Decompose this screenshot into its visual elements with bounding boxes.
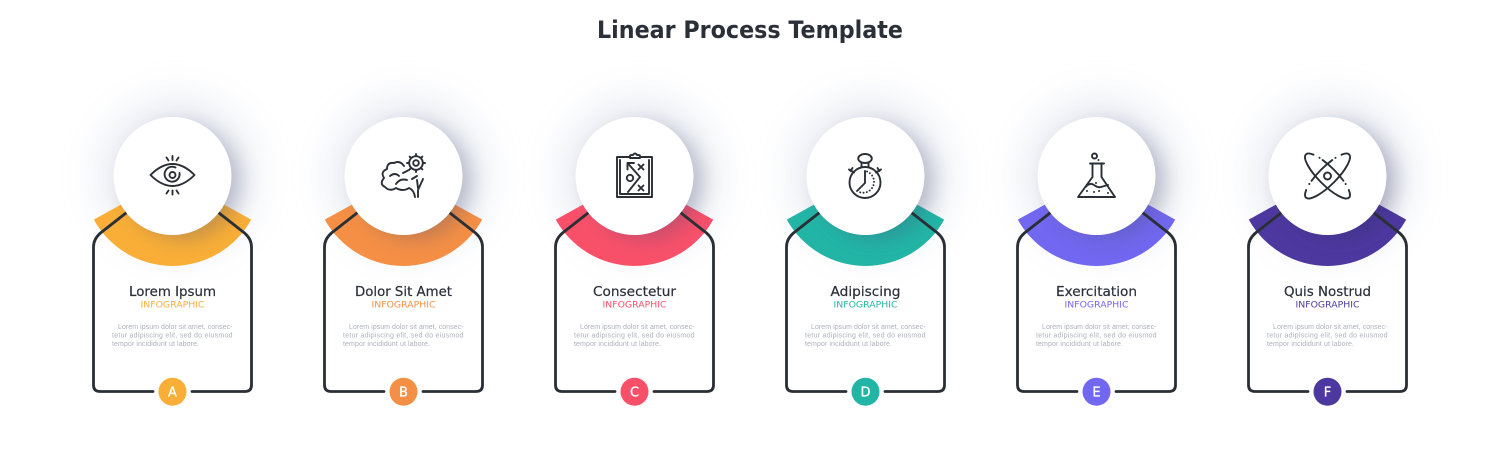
letter badge — [620, 378, 648, 406]
circle shadow — [126, 125, 240, 239]
description: tempor incididunt ut labore. — [343, 341, 430, 348]
description: Lorem ipsum dolor sit amet, consec- — [580, 324, 695, 331]
description — [1036, 324, 1157, 348]
name: Lorem Ipsum — [129, 285, 216, 300]
description: tetur adipiscing elit, sed do eiusmod — [112, 332, 233, 340]
description — [1267, 324, 1388, 348]
letter badge: C — [630, 386, 639, 400]
circle shadow — [1050, 125, 1164, 239]
soft halo shadow — [798, 104, 942, 248]
description: tempor incididunt ut labore. — [574, 341, 661, 348]
arc band — [556, 205, 713, 266]
frame outline — [94, 213, 252, 392]
letter badge — [390, 378, 418, 406]
description: tetur adipiscing elit, sed do eiusmod — [574, 332, 695, 340]
white circle — [1038, 117, 1156, 235]
letter badge: E — [1092, 386, 1101, 400]
icon: stopwatch — [849, 154, 881, 198]
white circle — [1268, 117, 1386, 235]
description: tetur adipiscing elit, sed do eiusmod — [805, 332, 926, 340]
card C: Consectetur — [556, 104, 714, 406]
description — [574, 324, 695, 348]
icon: atom — [1300, 148, 1355, 204]
soft halo shadow — [1260, 104, 1404, 248]
arc band — [94, 205, 251, 266]
title: Linear Process Template — [597, 16, 903, 44]
arc band — [1249, 205, 1406, 266]
description: tetur adipiscing elit, sed do eiusmod — [1036, 332, 1157, 340]
description: tempor incididunt ut labore. — [112, 341, 199, 348]
description: tetur adipiscing elit, sed do eiusmod — [343, 332, 464, 340]
soft halo shadow — [106, 104, 250, 248]
frame outline — [324, 213, 482, 392]
description: Lorem ipsum dolor sit amet, consec- — [1273, 324, 1388, 331]
letter badge: A — [168, 386, 177, 400]
name: Quis Nostrud — [1284, 285, 1371, 300]
description — [343, 324, 464, 348]
card A: Lorem Ipsum — [94, 104, 252, 406]
frame outline — [786, 213, 944, 392]
name: Consectetur — [593, 285, 677, 300]
icon: eye — [150, 156, 194, 194]
name: Dolor Sit Amet — [355, 285, 452, 300]
circle shadow — [588, 125, 702, 239]
description: Lorem ipsum dolor sit amet, consec- — [1042, 324, 1157, 331]
card F: Quis Nostrud — [1248, 104, 1406, 406]
arc band — [325, 205, 482, 266]
subtitle: INFOGRAPHIC — [834, 300, 898, 310]
letter badge — [1314, 378, 1342, 406]
letter badge — [158, 378, 186, 406]
letter badge: B — [399, 386, 408, 400]
circle shadow — [820, 125, 934, 239]
circle shadow — [358, 125, 472, 239]
white circle — [576, 117, 694, 235]
name: Adipiscing — [830, 285, 900, 300]
white circle — [114, 117, 232, 235]
description: Lorem ipsum dolor sit amet, consec- — [811, 324, 926, 331]
card E: Exercitation — [1018, 104, 1176, 406]
card B: Dolor Sit Amet — [324, 104, 482, 406]
description: Lorem ipsum dolor sit amet, consec- — [349, 324, 464, 331]
subtitle: INFOGRAPHIC — [602, 300, 667, 310]
soft halo shadow — [336, 104, 480, 248]
frame outline — [1018, 213, 1176, 392]
white circle — [344, 117, 462, 235]
description: Lorem ipsum dolor sit amet, consec- — [118, 324, 233, 331]
subtitle: INFOGRAPHIC — [140, 300, 205, 310]
description: tempor incididunt ut labore. — [805, 341, 892, 348]
letter badge — [852, 378, 880, 406]
subtitle: INFOGRAPHIC — [372, 300, 436, 310]
description: tetur adipiscing elit, sed do eiusmod — [1267, 332, 1388, 340]
letter badge: D — [860, 386, 871, 400]
description: tempor incididunt ut labore. — [1267, 341, 1354, 348]
letter badge — [1082, 378, 1110, 406]
soft halo shadow — [1030, 104, 1174, 248]
name: Exercitation — [1056, 285, 1137, 300]
letter badge: F — [1324, 386, 1331, 400]
frame outline — [556, 213, 714, 392]
description: tempor incididunt ut labore. — [1036, 341, 1123, 348]
soft halo shadow — [568, 104, 712, 248]
icon: flask — [1078, 154, 1115, 197]
white circle — [806, 117, 924, 235]
icon: brain with gear — [382, 154, 425, 197]
frame outline — [1248, 213, 1406, 392]
card D: Adipiscing — [786, 104, 944, 406]
description — [112, 324, 233, 348]
circle shadow — [1282, 125, 1396, 239]
subtitle: INFOGRAPHIC — [1064, 300, 1129, 310]
icon: tactics clipboard — [617, 154, 652, 197]
subtitle: INFOGRAPHIC — [1296, 300, 1360, 310]
arc band — [787, 205, 944, 266]
description — [805, 324, 926, 348]
arc band — [1018, 205, 1175, 266]
